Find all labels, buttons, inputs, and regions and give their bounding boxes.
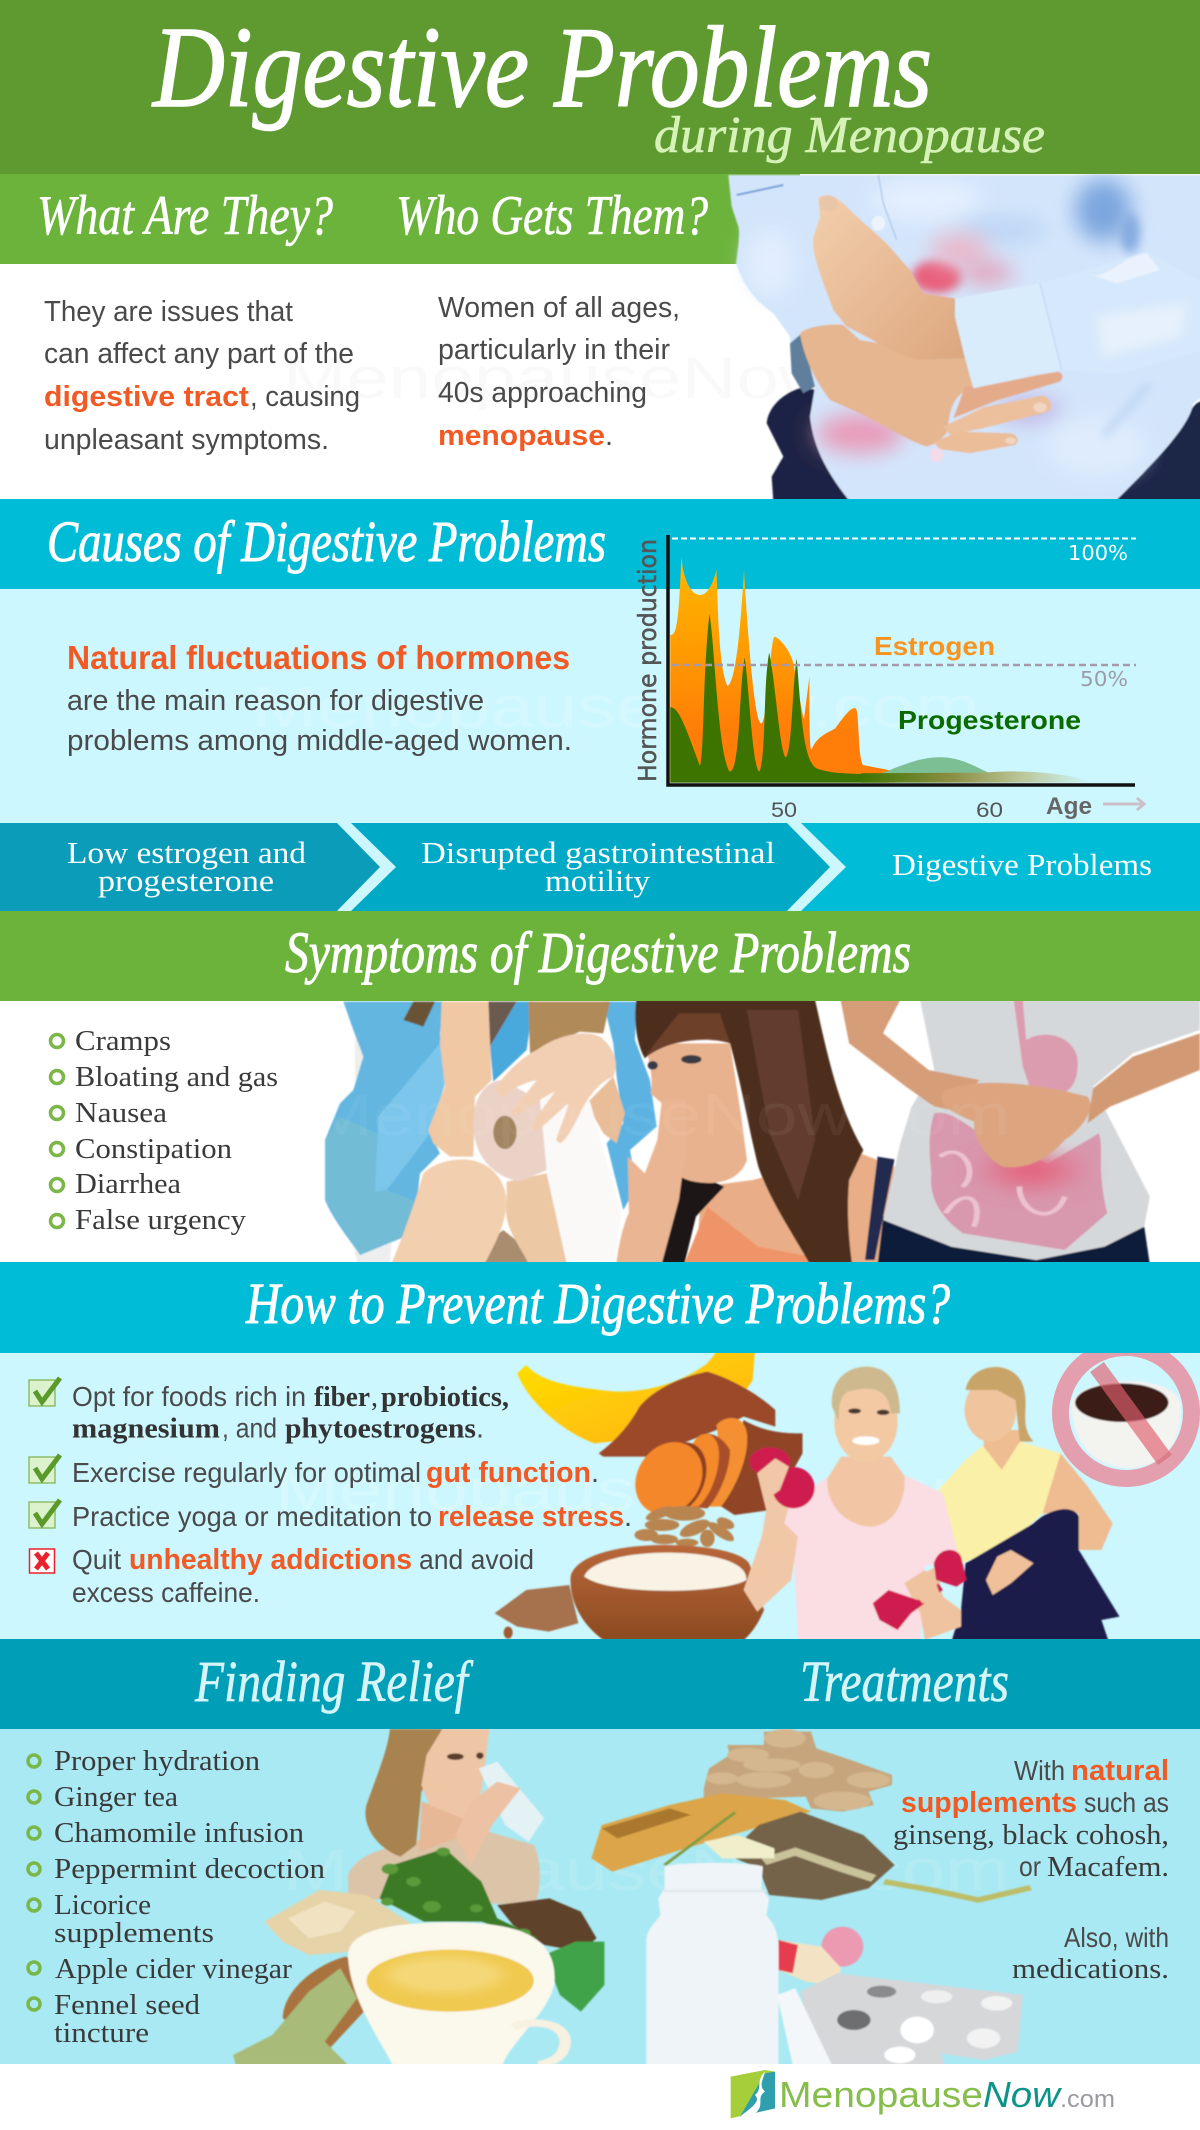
watermark: MenopauseNow.com [252,675,980,740]
text block: treatments: natural [1071,1755,1169,1787]
arrow: chevron two [787,823,846,911]
icon: check two [29,1455,60,1483]
text: exercise: Exercise regularly for optimal [72,1457,421,1488]
text: addictions: excess caffeine. [72,1577,260,1608]
text: exercise [72,1457,599,1489]
label: age: Age [1046,793,1092,820]
label: 50%: 50% [1080,667,1128,691]
text block: hormones: Natural fluctuations of hormones [67,639,570,676]
photo: woman with toilet roll, nauseous woman, abdomen [325,1000,1200,1265]
photo: woman holding abdomen [728,175,1200,502]
text block: hormones: are the main reason for digestive [67,685,484,717]
panel: footer logo [731,2070,1115,2118]
text: low estrogen and progesterone [67,835,307,898]
label: progesterone: Progesterone [898,705,1081,735]
arrow: age direction [1103,798,1144,810]
list: finding relief: Ginger tea [54,1781,178,1813]
label: estrogen: Estrogen [874,631,995,661]
text block: treatments: With [1014,1755,1065,1786]
icon: no caffeine [1060,1348,1192,1478]
axis label: hormone production: Hormone production [633,539,662,782]
list: finding relief: Apple cider vinegar [55,1953,292,1985]
list: finding relief: Chamomile infusion [54,1817,305,1849]
text: foods: magnesium [72,1414,220,1444]
label: age 60: 60 [976,799,1003,822]
icon: check one [29,1378,60,1406]
list: finding relief: Proper hydration [54,1745,261,1777]
text: low estrogen and progesterone: Low estrogen and [67,835,307,870]
area: progesterone [670,614,1088,783]
photo: woman drinking, tea and herbs [233,1729,1031,2065]
chart: hormone production by age [633,535,1144,822]
text block: treatments: Macafem. [1047,1851,1169,1883]
text: foods: . [476,1412,484,1444]
text: foods: fiber [314,1382,370,1413]
text block: treatments: ginseng, black cohosh, [893,1819,1169,1851]
text: yoga [72,1501,632,1533]
icon: cross [30,1549,54,1573]
heading: symptoms: Symptoms of Digestive Problems [285,920,911,985]
flow step: second [300,823,846,911]
text: foods [72,1381,509,1444]
text block: who gets them: menopause [438,420,605,452]
photo: foods and exercising women [495,1348,1192,1640]
text: foods: , [371,1382,378,1413]
heading: treatments: Treatments [800,1649,1009,1714]
text block: what are they: can affect any part of the [44,338,354,370]
text block: hormones: problems among middle-aged women. [67,725,572,757]
list: finding relief: tincture [54,2017,149,2049]
text block: treatments [893,1755,1169,1985]
list: finding relief: Peppermint decoction [54,1853,326,1885]
logo text: dot com: .com [1060,2086,1115,2113]
text block: treatments: such as [1084,1787,1169,1818]
label: 100%: 100% [1068,541,1128,565]
text block: who gets them [438,292,680,452]
text block: what are they: unpleasant symptoms. [44,424,329,456]
list: symptoms: Bloating and gas [75,1061,278,1093]
text block: who gets them: Women of all ages, [438,292,680,324]
text: digestive problems: Digestive Problems [892,847,1152,882]
text: addictions: Quit [72,1544,121,1575]
heading: who gets them: Who Gets Them? [396,185,708,247]
text block: treatments: medications. [1012,1953,1169,1985]
text block: what are they: digestive tract [44,381,249,413]
list: symptoms: Nausea [75,1097,167,1129]
text: foods: probiotics, [381,1382,509,1413]
logo text: menopause: Menopause [779,2074,983,2115]
subtitle: during Menopause [654,107,1045,164]
heading: causes: Causes of Digestive Problems [47,509,606,574]
title: Digestive Problems [151,4,932,132]
text: yoga: . [624,1501,632,1533]
panel: what are they and who gets them [0,174,1200,502]
text: yoga: release stress [438,1501,624,1533]
text: addictions: unhealthy addictions [129,1544,412,1576]
watermark: MenopauseNow.com [275,1458,995,1523]
panel: symptoms [0,911,1200,1265]
text: exercise: gut function [426,1457,591,1489]
text block: what are they [44,296,360,456]
list: finding relief: Licorice [54,1889,151,1921]
list: finding relief: Fennel seed [54,1989,201,2021]
text: foods: phytoestrogens [285,1414,476,1444]
flow step: first [0,823,394,911]
panel: finding relief and treatments [0,1639,1200,2065]
text: addictions: and avoid [419,1544,534,1575]
text: foods: , and [222,1412,277,1444]
list: symptoms: Diarrhea [75,1168,181,1200]
panel: header [0,0,1200,174]
logo text: now: Now [983,2074,1062,2115]
watermark: MenopauseNow.com [283,1838,1010,1903]
icon: logo face [731,2070,775,2118]
text: foods: Opt for foods rich in [72,1381,306,1412]
list: symptoms [50,1025,278,1236]
fingers and lower hand [800,325,973,447]
text: yoga: Practice yoga or meditation to [72,1501,432,1532]
list: symptoms: False urgency [75,1204,247,1236]
text block: who gets them: 40s approaching [438,377,647,409]
list: symptoms: Constipation [75,1133,233,1165]
text block: treatments: or [1019,1851,1041,1882]
heading: what are they: What Are They? [37,185,333,247]
panel: how to prevent [0,1262,1200,1640]
area: estrogen [670,557,896,783]
list: finding relief: supplements [54,1917,214,1949]
text block: treatments: supplements [901,1787,1077,1819]
text block: hormones [67,639,572,757]
list: symptoms: Cramps [75,1025,171,1057]
arrow: chevron one [337,823,396,911]
heading: finding relief: Finding Relief [194,1649,474,1714]
text: low estrogen and progesterone: progesterone [98,863,274,898]
text block: who gets them: . [605,420,613,452]
text: addictions [72,1544,534,1608]
text: exercise: . [591,1457,599,1489]
text block: treatments: Also, with [1064,1922,1169,1953]
text block: what are they: , causing [250,381,360,413]
list: finding relief [28,1745,326,2049]
text: disrupted gastrointestinal motility [421,835,775,898]
text block: what are they: They are issues that [44,296,293,328]
text: disrupted gastrointestinal motility: Disrupted gastrointestinal [421,835,775,870]
watermark: MenopauseNow.com [310,1083,1010,1148]
label: age 50: 50 [771,799,797,822]
panel: flow of causes [0,823,1200,911]
text block: who gets them: particularly in their [438,334,670,366]
heading: prevention: How to Prevent Digestive Problems? [245,1271,950,1336]
text: disrupted gastrointestinal motility: motility [545,863,651,898]
panel: causes of digestive problems [0,499,1200,823]
icon: check three [29,1500,60,1528]
